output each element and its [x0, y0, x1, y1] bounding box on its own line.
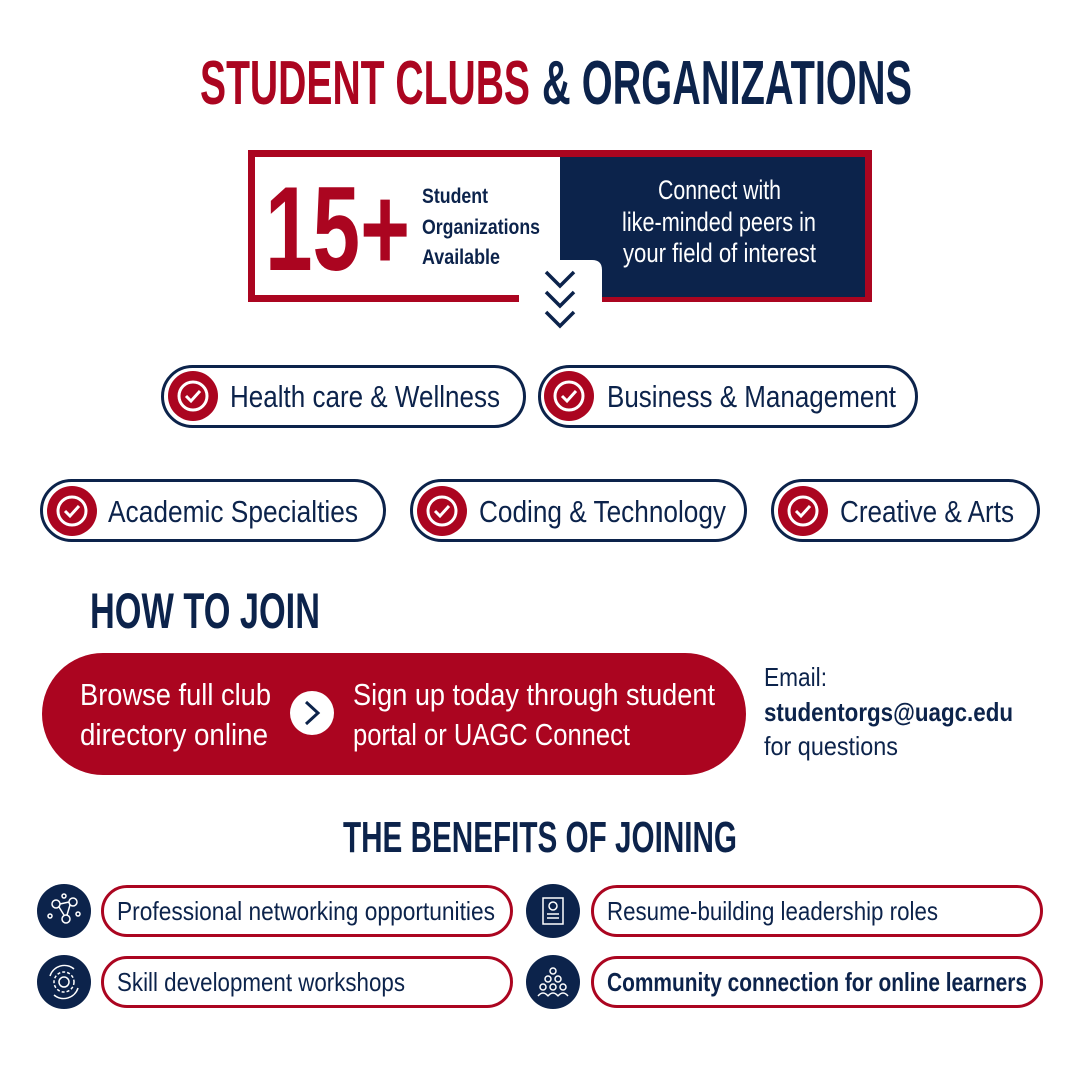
benefit: resume: [592, 886, 1042, 936]
join steps banner: Browse full club: [80, 677, 271, 712]
15+: 15+: [265, 162, 410, 296]
icon: resume: [526, 884, 580, 938]
stat label: Available: [422, 246, 500, 269]
email text: studentorgs@uagc.edu: [764, 697, 1013, 727]
pill: Coding & Technology: [412, 480, 746, 540]
join steps banner: directory online: [80, 717, 268, 752]
arrow: chevrons: [546, 272, 574, 326]
email text: [764, 662, 1013, 761]
pill: Health care & Wellness: [162, 366, 524, 426]
pill: Coding & Technology: Coding & Technology: [479, 494, 726, 529]
join steps banner: portal or UAGC Connect: [353, 717, 630, 752]
stats box: [252, 154, 868, 304]
benefit: skills: [102, 958, 512, 1006]
icon: arrow circle: [290, 691, 334, 735]
category pills: [42, 366, 1038, 540]
pill: Business & Management: [540, 366, 916, 426]
benefit: community: [592, 958, 1042, 1006]
email text: for questions: [764, 731, 898, 761]
heading: how to join: HOW TO JOIN: [90, 583, 320, 639]
benefit: networking: [102, 886, 512, 936]
pill: Health care & Wellness: Health care & Wellness: [230, 379, 500, 414]
pill: Academic Specialties: Academic Specialties: [108, 494, 358, 529]
connect text: Connect with: [658, 175, 781, 205]
benefit: skills: Skill development workshops: [117, 967, 405, 997]
stat label: Student: [422, 185, 488, 208]
pill: Creative & Arts: Creative & Arts: [840, 494, 1014, 529]
pill: Creative & Arts: [772, 480, 1038, 540]
email text: Email:: [764, 662, 827, 692]
benefits list: [37, 884, 1042, 1009]
connect text: your field of interest: [623, 238, 816, 268]
navy panel: [560, 157, 865, 297]
join steps banner: [42, 653, 746, 775]
join steps banner: Sign up today through student: [353, 677, 715, 712]
pill: Academic Specialties: [42, 480, 384, 540]
icon: gear: [37, 955, 91, 1009]
stat label: [422, 185, 540, 269]
connect text: like-minded peers in: [622, 207, 816, 237]
icon: community: [526, 955, 580, 1009]
connect text: [622, 175, 816, 268]
benefit: resume: Resume-building leadership roles: [607, 896, 938, 926]
heading: benefits: THE BENEFITS OF JOINING: [343, 813, 737, 862]
title: STUDENT CLUBS: [200, 49, 530, 118]
pill: Business & Management: Business & Management: [607, 379, 896, 414]
icon: networking: [37, 884, 91, 938]
stat label: Organizations: [422, 216, 540, 239]
benefit: networking: Professional networking opportunities: [117, 896, 495, 926]
